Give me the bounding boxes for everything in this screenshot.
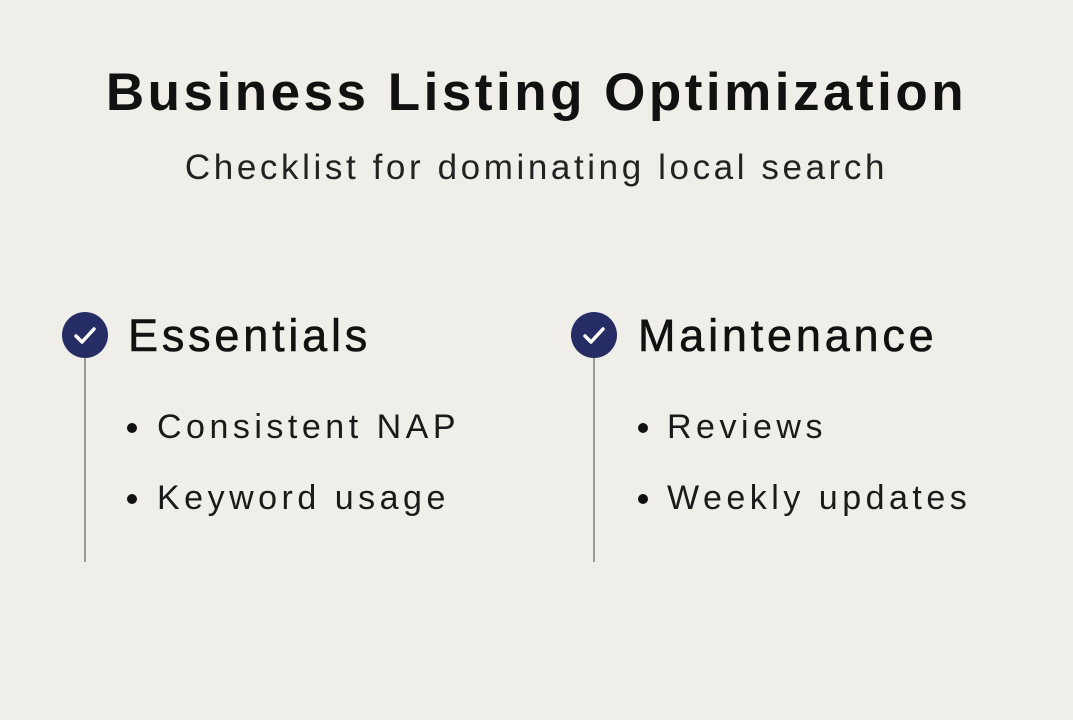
bullet list: Weekly updates [667, 479, 971, 517]
panel: maintenance [571, 310, 971, 562]
heading: Essentials [128, 310, 371, 361]
title: Business Listing Optimization [106, 63, 967, 122]
subtitle: Checklist for dominating local search [185, 148, 888, 187]
icon: check circle [62, 312, 108, 358]
heading: Maintenance [638, 310, 937, 361]
bullet list: Keyword usage [157, 479, 450, 517]
timeline line [593, 358, 595, 562]
bullet list: Consistent NAP [157, 408, 460, 446]
bullet list [127, 408, 460, 517]
timeline line [84, 358, 86, 562]
icon: check circle [571, 312, 617, 358]
bullet list [638, 408, 971, 517]
panel: essentials [62, 310, 460, 562]
bullet list: Reviews [667, 408, 827, 446]
